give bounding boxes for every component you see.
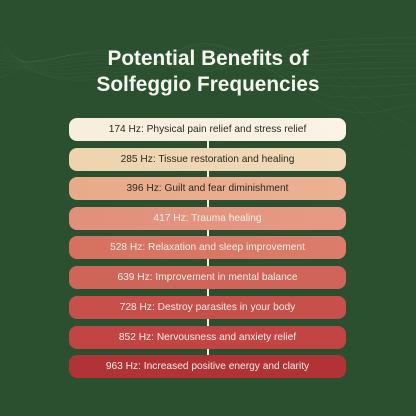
connector: 639 to 728	[207, 288, 208, 297]
title: Solfeggio Frequencies	[96, 73, 320, 96]
bar: 174 Hz	[69, 118, 346, 141]
connector: 728 to 852	[207, 318, 208, 327]
connector: 285 to 396	[207, 170, 208, 178]
bar: 417 Hz	[69, 207, 346, 230]
bar: 852 Hz: 852 Hz: Nervousness and anxiety relief	[119, 332, 296, 343]
connector: 852 to 963	[207, 348, 208, 356]
bar: 285 Hz	[69, 148, 346, 171]
bar: 852 Hz	[69, 326, 346, 349]
bar: 528 Hz: 528 Hz: Relaxation and sleep improvement	[110, 242, 305, 253]
connector: 417 to 528	[207, 229, 208, 237]
bar: 528 Hz	[69, 236, 346, 259]
bar: 396 Hz: 396 Hz: Guilt and fear diminishment	[127, 183, 288, 194]
bar: 396 Hz	[69, 177, 346, 200]
bar: 963 Hz	[69, 355, 346, 378]
bar: 728 Hz	[69, 296, 346, 319]
bar: 728 Hz: 728 Hz: Destroy parasites in your body	[120, 302, 295, 313]
title	[96, 47, 320, 96]
connector: 396 to 417	[207, 199, 208, 208]
title: Potential Benefits of	[107, 47, 309, 70]
bar: 285 Hz: 285 Hz: Tissue restoration and healing	[121, 154, 294, 165]
bar: 417 Hz: 417 Hz: Trauma healing	[153, 213, 262, 224]
bar: 639 Hz: 639 Hz: Improvement in mental balance	[117, 272, 298, 283]
connector: 528 to 639	[207, 258, 208, 267]
bar: 639 Hz	[69, 266, 346, 289]
connector: 174 to 285	[207, 140, 208, 149]
bar: 174 Hz: 174 Hz: Physical pain relief and stress relief	[109, 124, 306, 135]
bar: 963 Hz: 963 Hz: Increased positive energy and clarity	[106, 361, 309, 372]
